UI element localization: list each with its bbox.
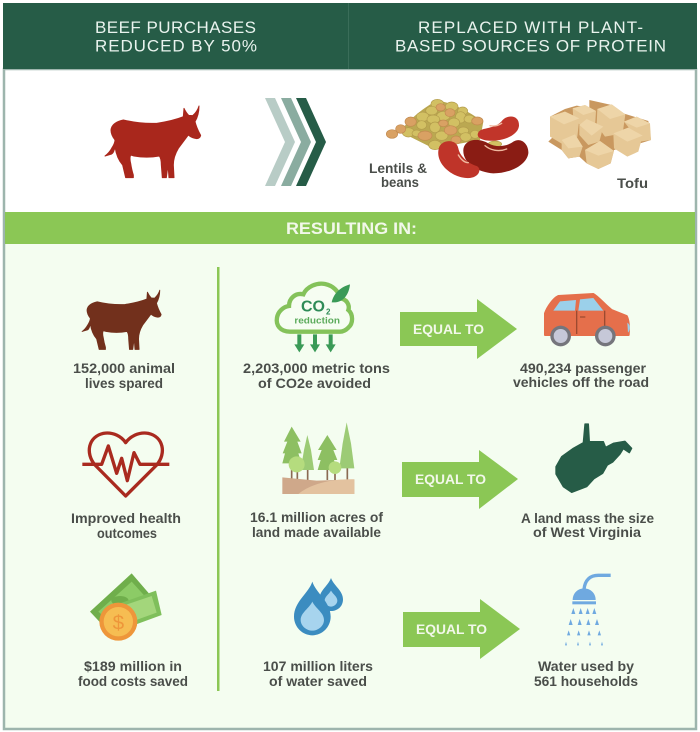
label: tofu: Tofu <box>617 175 648 191</box>
label: water saved <box>263 658 373 689</box>
label: land made available: 16.1 million acres of <box>250 509 383 525</box>
heading: beef purchases <box>95 18 257 56</box>
icon: money and coin <box>90 573 162 641</box>
label: water used by households <box>534 658 638 689</box>
arrow: equal to (vehicles): EQUAL TO <box>413 322 484 337</box>
icon: CO2 reduction cloud <box>277 284 352 352</box>
panel: bottom results background <box>4 244 696 728</box>
icon: red cow <box>105 106 201 178</box>
heading: replaced with plant-based protein: REPLACED WITH PLANT- <box>418 18 643 37</box>
heading: beef purchases: REDUCED BY 50% <box>95 36 257 56</box>
label: land made available: land made available <box>252 524 381 540</box>
divider line <box>217 267 220 691</box>
heading: replaced with plant-based protein <box>395 18 666 56</box>
banner: resulting in <box>5 212 695 244</box>
icon: CO2 reduction cloud: reduction <box>294 315 340 325</box>
icon: CO2 reduction cloud: 2 <box>326 308 331 317</box>
arrow: equal to (water): EQUAL TO <box>416 622 487 637</box>
label: food costs saved: $189 million in <box>84 658 182 674</box>
icon: money and coin: $ <box>113 611 125 634</box>
label: West Virginia land mass: A land mass the size <box>521 510 654 526</box>
label: vehicles off the road: vehicles off the road <box>513 374 649 390</box>
label: lentils and beans <box>369 160 427 190</box>
label: CO2e avoided <box>243 360 390 391</box>
icon: tofu cubes <box>548 100 651 169</box>
banner: resulting in: RESULTING IN: <box>286 219 417 238</box>
icon: triple chevron arrow <box>265 98 326 186</box>
label: improved health outcomes: outcomes <box>97 525 157 541</box>
icon: heart with pulse <box>82 433 169 496</box>
arrow: equal to (vehicles) <box>400 299 517 359</box>
icon: car <box>545 294 630 346</box>
label: water used by households: 561 households <box>534 673 638 689</box>
label: water used by households: Water used by <box>538 658 634 674</box>
icon: West Virginia map <box>556 424 632 492</box>
label: West Virginia land mass: of West Virginia <box>533 524 641 540</box>
label: water saved: of water saved <box>269 673 367 689</box>
label: vehicles off the road <box>513 360 649 390</box>
icon: CO2 reduction cloud: CO <box>301 299 325 316</box>
label: animal lives spared <box>73 360 175 391</box>
icon: water drops <box>294 578 343 635</box>
label: CO2e avoided: 2,203,000 metric tons <box>243 360 390 376</box>
icon: trees and land <box>282 422 354 494</box>
icon: brown cow <box>82 290 161 349</box>
icon: lentils pile and kidney beans <box>386 99 528 178</box>
heading: beef purchases: BEEF PURCHASES <box>95 18 256 37</box>
label: CO2e avoided: of CO2e avoided <box>258 375 371 391</box>
label: food costs saved <box>78 658 188 689</box>
arrow: equal to (land): EQUAL TO <box>415 472 486 487</box>
heading: replaced with plant-based protein: BASED SOURCES OF PROTEIN <box>395 36 666 56</box>
label: West Virginia land mass <box>521 510 654 540</box>
arrow: equal to (land) <box>402 450 518 509</box>
label: land made available <box>250 509 383 540</box>
icon: shower head <box>565 575 611 645</box>
label: improved health outcomes: Improved health <box>71 510 181 526</box>
label: vehicles off the road: 490,234 passenger <box>520 360 647 376</box>
label: improved health outcomes <box>71 510 181 541</box>
label: lentils and beans: Lentils & <box>369 160 427 176</box>
label: lentils and beans: beans <box>381 174 419 190</box>
label: animal lives spared: lives spared <box>85 375 163 391</box>
label: water saved: 107 million liters <box>263 658 373 674</box>
panel: top header band <box>3 3 697 69</box>
label: animal lives spared: 152,000 animal <box>73 360 175 376</box>
label: food costs saved: food costs saved <box>78 673 188 689</box>
arrow: equal to (water) <box>403 599 520 659</box>
